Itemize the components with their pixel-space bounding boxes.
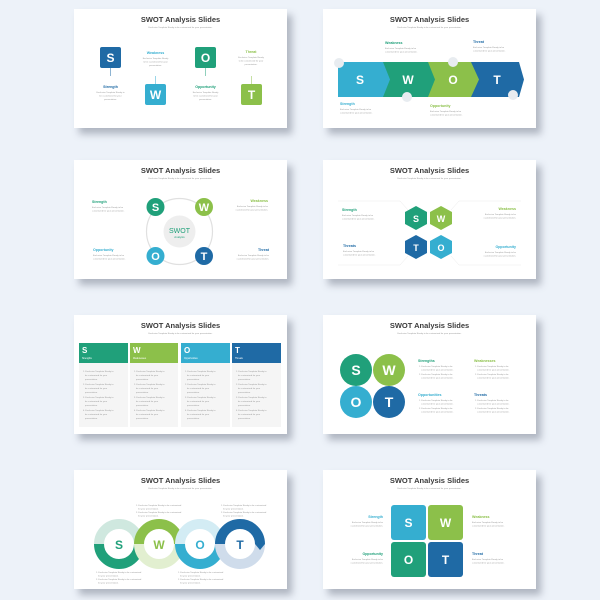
- slide 6: circles: Strengths: [418, 359, 435, 363]
- slide 1: squares: Exclusive Template Ready to be customized for your presentation.: [148, 26, 213, 29]
- slide 5: columns: 2. Exclusive Template Ready to: [185, 383, 216, 386]
- slide 6: circles: 1. Exclusive Template Ready to be: [419, 365, 453, 368]
- slide 5: columns: presentation.: [85, 391, 98, 394]
- slide 4: hexagons: SWOT Analysis Slides: [390, 166, 469, 175]
- slide 5: columns: presentation.: [85, 404, 98, 407]
- slide 1: squares: [74, 9, 287, 128]
- slide 2: arrows: W: [402, 73, 414, 87]
- slide 8: grid: Exclusive Template Ready to be: [352, 558, 384, 561]
- slide 4: hexagons: Threats: [343, 244, 356, 248]
- slide 7: rings: O: [195, 538, 205, 552]
- slide 8: grid: S: [404, 516, 413, 530]
- slide 8: grid: Exclusive Template Ready to be: [472, 558, 504, 561]
- slide 1: squares: to be customized for your: [239, 60, 264, 62]
- slide 7: rings: 1. Exclusive Template Ready to be customized: [96, 571, 142, 574]
- slide 4: hexagons: Exclusive Template Ready to be: [342, 214, 374, 217]
- slide 7: rings: for your presentation.: [180, 582, 201, 584]
- slide 8: grid: customized for your presentation.: [351, 524, 383, 528]
- slide 2: arrows: Opportunity: [430, 104, 451, 108]
- slide 7: rings: 1. Exclusive Template Ready to be customized: [221, 504, 267, 507]
- slide 4: hexagons: W: [437, 214, 446, 224]
- slide 3: cycle: customized for your presentation.: [92, 210, 125, 212]
- slide 5: columns: be customized for your: [238, 387, 260, 390]
- slide 7: rings: for your presentation.: [98, 574, 119, 578]
- slide 3: cycle: Exclusive Template Ready to be: [92, 206, 124, 209]
- slide 5: columns: S: [82, 346, 88, 355]
- slide 5: columns: 2. Exclusive Template Ready to: [134, 383, 165, 386]
- slide 5: columns: be customized for your: [187, 413, 209, 416]
- slide 6: circles: O: [351, 394, 362, 410]
- slide 1: squares: S: [106, 51, 115, 65]
- slide 5: columns: be customized for your: [136, 374, 158, 377]
- slide 8: grid: customized for your presentation.: [351, 562, 383, 564]
- slide 3: cycle: T: [201, 251, 208, 263]
- slide 4: hexagons: Strength: [342, 208, 357, 212]
- slide 7: rings: for your presentation.: [98, 582, 119, 584]
- slide 5: columns: be customized for your: [238, 400, 260, 403]
- slide 1: squares: presentation.: [245, 63, 258, 66]
- slide 4: hexagons: Exclusive Template Ready to be customized for your presentation.: [397, 177, 462, 180]
- slide 5: columns: 4. Exclusive Template Ready to: [236, 409, 267, 412]
- slide 5: columns: be customized for your: [85, 413, 107, 416]
- slide 6: circles: 1. Exclusive Template Ready to be: [475, 399, 509, 402]
- slide 5: columns: T: [235, 346, 240, 355]
- slide 3: cycle: customized for your presentation.: [93, 258, 126, 260]
- slide 5: columns: 3. Exclusive Template Ready to: [134, 396, 165, 399]
- slide 1: squares: W: [150, 88, 162, 102]
- slide 5: columns: presentation.: [85, 417, 98, 420]
- slide 5: columns: presentation.: [187, 391, 200, 394]
- slide 2: arrows: customized for your presentation.: [385, 50, 418, 54]
- slide 5: columns: be customized for your: [238, 413, 260, 416]
- slide 5: columns: Opportunities: [184, 357, 199, 360]
- slide 1: squares: be customized for your: [99, 94, 122, 98]
- slide 8: grid: Opportunity: [362, 552, 383, 556]
- slide 2: arrows: customized for your presentation.: [340, 112, 373, 114]
- slide 5: columns: be customized for your: [136, 400, 158, 403]
- slide 5: columns: presentation.: [136, 404, 149, 407]
- slide 2: arrows: SWOT Analysis Slides: [390, 15, 469, 24]
- slide 8: grid: customized for your presentation.: [472, 524, 505, 528]
- slide 2: arrows: S: [356, 73, 364, 87]
- slide 7: rings: 2. Exclusive Template Ready to be customized: [136, 511, 182, 514]
- slide 8: grid: Weakness: [472, 515, 490, 519]
- slide 5: columns: be customized for your: [85, 387, 107, 390]
- slide 6: circles: 1. Exclusive Template Ready to be: [419, 399, 453, 402]
- slide 6: circles: Opportunities: [418, 393, 442, 397]
- slide 6: circles: customized for your presentation.: [477, 402, 510, 406]
- slide 6: circles: SWOT Analysis Slides: [390, 321, 469, 330]
- slide 8: grid: SWOT Analysis Slides: [390, 476, 469, 485]
- slide 1: squares: Exclusive Template Ready to: [96, 91, 125, 94]
- slide 1: squares: to be customized for your: [143, 60, 168, 64]
- slide 5: columns: W: [133, 346, 141, 355]
- slide 6: circles: S: [351, 362, 361, 378]
- slide 5: columns: presentation.: [238, 404, 251, 407]
- slide 5: columns: presentation.: [238, 417, 251, 420]
- slide 5: columns: 3. Exclusive Template Ready to: [83, 396, 114, 399]
- slide 7: rings: 2. Exclusive Template Ready to be customized: [178, 578, 224, 581]
- slide 4: hexagons: customized for your presentation.: [342, 218, 375, 220]
- slide 5: columns: O: [184, 346, 190, 355]
- slide 4: hexagons: customized for your presentation.: [343, 254, 376, 256]
- slide 5: columns: SWOT Analysis Slides: [141, 321, 220, 330]
- slide 7: rings: 2. Exclusive Template Ready to be customized: [221, 511, 267, 514]
- slide 6: circles: Exclusive Template Ready to be customized for your presentation.: [397, 332, 462, 335]
- slide 2: arrows: Exclusive Template Ready to be: [385, 47, 417, 50]
- slide 4: hexagons: customized for your presentation.: [484, 216, 516, 220]
- slide 7: rings: for your presentation.: [180, 574, 201, 578]
- slide 5: columns: 1. Exclusive Template Ready to: [236, 370, 267, 373]
- slide 1: squares: Threat: [246, 50, 257, 54]
- slide 3: cycle: Weakness: [250, 199, 268, 203]
- slide 3: cycle: Exclusive Template Ready to be: [238, 254, 270, 257]
- slide 6: circles: 2. Exclusive Template Ready to be: [419, 407, 453, 410]
- slide 1: squares: Exclusive Template Ready: [238, 56, 265, 59]
- slide 5: columns: 3. Exclusive Template Ready to: [185, 396, 216, 399]
- slide 7: rings: for your presentation.: [138, 508, 159, 510]
- slide 5: columns: 4. Exclusive Template Ready to: [83, 409, 114, 412]
- slide 7: rings: 1. Exclusive Template Ready to be customized: [136, 504, 182, 507]
- slide 4: hexagons: O: [437, 243, 445, 253]
- slide 6: circles: 2. Exclusive Template Ready to be: [475, 407, 509, 410]
- slide 7: rings: Exclusive Template Ready to be customized for your presentation.: [148, 487, 213, 490]
- slide 7: rings: 1. Exclusive Template Ready to be customized: [178, 571, 224, 574]
- slide 5: columns: 3. Exclusive Template Ready to: [236, 396, 267, 399]
- slide 2: arrows: Weakness: [385, 41, 403, 45]
- slide 2: arrows: Exclusive Template Ready to be: [430, 110, 462, 113]
- slide 3: cycle: O: [151, 251, 160, 263]
- slide 3: cycle: customized for your presentation.: [237, 258, 269, 260]
- slide 5: columns: presentation.: [187, 404, 200, 407]
- slide 8: grid: W: [440, 516, 452, 530]
- slide 6: circles: 2. Exclusive Template Ready to be: [475, 373, 509, 376]
- slide 2: arrows: Exclusive Template Ready to be: [340, 108, 372, 111]
- slide 5: columns: Exclusive Template Ready to be customized for your presentation.: [148, 332, 213, 335]
- slide 5: columns: 1. Exclusive Template Ready to: [185, 370, 216, 373]
- slide 5: columns: presentation.: [136, 417, 149, 420]
- slide 1: squares: SWOT Analysis Slides: [141, 15, 220, 24]
- slide 6: circles: customized for your presentation.: [421, 402, 454, 406]
- slide 3: cycle: Exclusive Template Ready to be: [237, 205, 269, 208]
- slide 8: grid: Strength: [368, 515, 383, 519]
- slide 5: columns: 1. Exclusive Template Ready to: [83, 370, 114, 373]
- slide 6: circles: Threats: [474, 393, 487, 397]
- slide 8: grid: O: [404, 553, 413, 567]
- slide 7: rings: S: [115, 538, 123, 552]
- slide 5: columns: 4. Exclusive Template Ready to: [185, 409, 216, 412]
- slide 1: squares: Opportunity: [195, 85, 216, 89]
- slide 5: columns: be customized for your: [136, 387, 158, 390]
- slide 3: cycle: customized for your presentation.: [236, 208, 268, 212]
- slide 5: columns: Strengths: [82, 357, 93, 360]
- slide 2: arrows: O: [448, 73, 458, 87]
- slide 4: hexagons: Exclusive Template Ready to be: [343, 250, 375, 253]
- slide 7: rings: W: [153, 538, 165, 552]
- slide 2: arrows: Exclusive Template Ready to be: [473, 46, 505, 49]
- slide 6: circles: customized for your presentation.: [421, 368, 454, 372]
- slide 5: columns: Threats: [235, 357, 244, 360]
- slide 4: hexagons: customized for your presentation.: [484, 254, 516, 258]
- slide 1: squares: to be customized for your: [193, 94, 218, 98]
- slide 1: squares: Exclusive Template Ready: [193, 91, 219, 94]
- slide 6: circles: [323, 315, 536, 434]
- slide 1: squares: presentation.: [149, 64, 162, 67]
- slide 6: circles: Weaknesses: [474, 359, 496, 363]
- slide 6: circles: W: [382, 362, 396, 378]
- slide 5: columns: presentation.: [238, 378, 251, 381]
- slide 7: rings: T: [236, 538, 244, 552]
- slide 4: hexagons: [323, 160, 536, 279]
- slide 1: squares: T: [248, 88, 256, 102]
- slide 5: columns: presentation.: [238, 391, 251, 394]
- slide 8: grid: [323, 470, 536, 589]
- slide 5: columns: 2. Exclusive Template Ready to: [83, 383, 114, 386]
- slide 7: rings: for your presentation.: [223, 514, 244, 518]
- slide 1: squares: Exclusive Template Ready: [143, 57, 169, 60]
- slide 3: cycle: W: [199, 202, 210, 214]
- slide 3: cycle: Exclusive Template Ready to be customized for your presentation.: [148, 177, 213, 180]
- slide 5: columns: Weaknesses: [133, 358, 147, 360]
- slide 4: hexagons: S: [413, 214, 419, 224]
- slide 6: circles: customized for your presentation.: [477, 376, 510, 380]
- slide 5: columns: presentation.: [136, 378, 149, 381]
- slide 8: grid: Exclusive Template Ready to be: [352, 521, 384, 524]
- slide 8: grid: Exclusive Template Ready to be: [472, 521, 504, 524]
- slide 5: columns: 1. Exclusive Template Ready to: [134, 370, 165, 373]
- slide 6: circles: 1. Exclusive Template Ready to be: [475, 365, 509, 368]
- slide 4: hexagons: T: [413, 243, 419, 253]
- slide 3: cycle: SWOT: [169, 228, 191, 235]
- slide 1: squares: Weakness: [147, 51, 164, 55]
- slide 5: columns: be customized for your: [238, 374, 260, 377]
- slide 6: circles: customized for your presentation.: [477, 410, 510, 414]
- slide 2: arrows: customized for your presentation.: [473, 50, 506, 52]
- slide 4: hexagons: Weakness: [498, 207, 516, 211]
- slide 1: squares: O: [201, 51, 210, 65]
- slide 2: arrows: [323, 9, 536, 128]
- slide 5: columns: presentation.: [187, 378, 200, 381]
- slide 5: columns: presentation.: [85, 378, 98, 381]
- slide 5: columns: be customized for your: [187, 374, 209, 377]
- slide 2: arrows: Strength: [340, 102, 355, 106]
- slide 3: cycle: Strength: [92, 200, 107, 204]
- slide 7: rings: for your presentation.: [138, 514, 159, 518]
- slide 1: squares: presentation.: [199, 98, 212, 101]
- slide 5: columns: presentation.: [136, 391, 149, 394]
- slide 6: circles: customized for your presentation.: [477, 368, 510, 372]
- slide 5: columns: presentation.: [187, 417, 200, 420]
- slide 3: cycle: SWOT Analysis Slides: [141, 166, 220, 175]
- slide 5: columns: be customized for your: [85, 400, 107, 403]
- slide 3: cycle: [74, 160, 287, 279]
- slide 3: cycle: Exclusive Template Ready to be: [93, 254, 125, 257]
- slide 7: rings: [74, 470, 287, 589]
- slide 5: columns: [74, 315, 287, 434]
- slide 7: rings: for your presentation.: [223, 508, 244, 510]
- slide 8: grid: T: [442, 553, 450, 567]
- slide 5: columns: be customized for your: [136, 413, 158, 416]
- slide 4: hexagons: Exclusive Template Ready to be: [485, 213, 517, 216]
- slide 5: columns: be customized for your: [187, 387, 209, 390]
- slide 2: arrows: Exclusive Template Ready to be customized for your presentation.: [397, 26, 462, 29]
- slide 3: cycle: Threat: [258, 248, 270, 252]
- slide 5: columns: 4. Exclusive Template Ready to: [134, 409, 165, 412]
- slide 2: arrows: customized for your presentation.: [430, 114, 463, 116]
- slide 8: grid: customized for your presentation.: [472, 562, 505, 564]
- slide 6: circles: customized for your presentation.: [421, 376, 454, 380]
- slide 1: squares: Strength: [103, 85, 118, 89]
- slide 5: columns: be customized for your: [85, 374, 107, 377]
- slide 8: grid: Exclusive Template Ready to be customized for your presentation.: [397, 487, 462, 490]
- slide 6: circles: customized for your presentation.: [421, 410, 454, 414]
- slide 8: grid: Threat: [472, 552, 484, 556]
- slide 1: squares: presentation.: [104, 98, 117, 101]
- slide 2: arrows: Threat: [473, 40, 485, 44]
- slide 6: circles: 2. Exclusive Template Ready to be: [419, 373, 453, 376]
- slide 4: hexagons: Opportunity: [495, 245, 516, 249]
- slide 3: cycle: Analysis: [174, 235, 185, 239]
- slide 3: cycle: S: [152, 202, 159, 214]
- slide 4: hexagons: Exclusive Template Ready to be: [485, 251, 517, 254]
- slide 7: rings: SWOT Analysis Slides: [141, 476, 220, 485]
- slide 5: columns: 2. Exclusive Template Ready to: [236, 383, 267, 386]
- slide 7: rings: 2. Exclusive Template Ready to be customized: [96, 578, 142, 581]
- slide 6: circles: T: [385, 394, 394, 410]
- slide 5: columns: be customized for your: [187, 400, 209, 403]
- slide 2: arrows: T: [493, 73, 501, 87]
- slide 3: cycle: Opportunity: [93, 248, 114, 252]
